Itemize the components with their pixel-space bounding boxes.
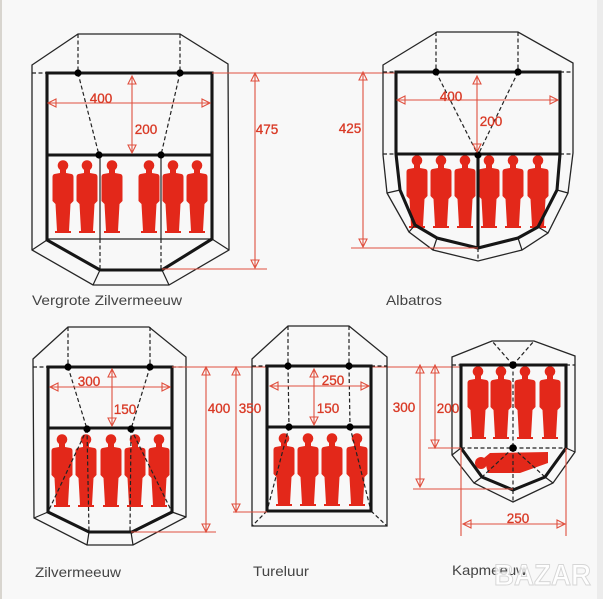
- dimensions: [50, 367, 461, 532]
- tent floor plan: [252, 326, 387, 526]
- dimensions: 200: [135, 122, 157, 137]
- tent outline: [383, 32, 573, 261]
- panel: Vergrote Zilvermeeuw: [32, 34, 395, 308]
- dimensions: [339, 72, 558, 248]
- tent outline: [32, 34, 229, 285]
- caption: Vergrote Zilvermeeuw: [32, 292, 183, 308]
- dimensions: 400: [208, 401, 230, 416]
- dimensions: 400: [90, 91, 112, 106]
- tent outline: [452, 341, 575, 502]
- people: four standing figures: [468, 366, 560, 439]
- people: five red figures: [52, 434, 170, 507]
- people: six red figures: [406, 155, 548, 228]
- dimensions: 350: [239, 401, 261, 416]
- caption: Kapmeeuw: [452, 562, 528, 578]
- watermark: BAZAR: [494, 559, 591, 592]
- dimensions: 200: [437, 401, 459, 416]
- tent floor plan: [33, 327, 186, 545]
- dimensions: 250: [507, 511, 529, 526]
- dimensions: 300: [78, 374, 100, 389]
- panel: Tureluur: [232, 326, 387, 579]
- tent floor plan: [32, 34, 229, 285]
- dimensions: [232, 367, 369, 512]
- panel: Zilvermeeuw: [33, 327, 461, 580]
- people: four red figures: [274, 433, 368, 506]
- tent floor plan: [452, 341, 575, 502]
- panel: Kapmeeuw: [393, 341, 575, 578]
- caption: Zilvermeeuw: [35, 564, 122, 580]
- caption: Albatros: [386, 292, 442, 308]
- dimensions: 400: [440, 89, 462, 104]
- panel: Albatros: [339, 32, 573, 308]
- dimensions: [393, 365, 566, 536]
- tent outline: [252, 326, 387, 526]
- caption: Tureluur: [253, 563, 309, 579]
- people: six red figures: [52, 160, 208, 233]
- dimensions: 150: [114, 402, 136, 417]
- dimensions: 300: [393, 400, 415, 415]
- dimensions: 250: [322, 373, 344, 388]
- dimensions: 150: [317, 401, 339, 416]
- dimensions: 425: [339, 121, 361, 136]
- dimensions: 475: [256, 122, 278, 137]
- dimensions: [48, 73, 395, 269]
- tent outline: [33, 327, 186, 545]
- person lying down: [475, 452, 548, 473]
- dimensions: 200: [480, 114, 502, 129]
- tent floor plan: [383, 32, 573, 261]
